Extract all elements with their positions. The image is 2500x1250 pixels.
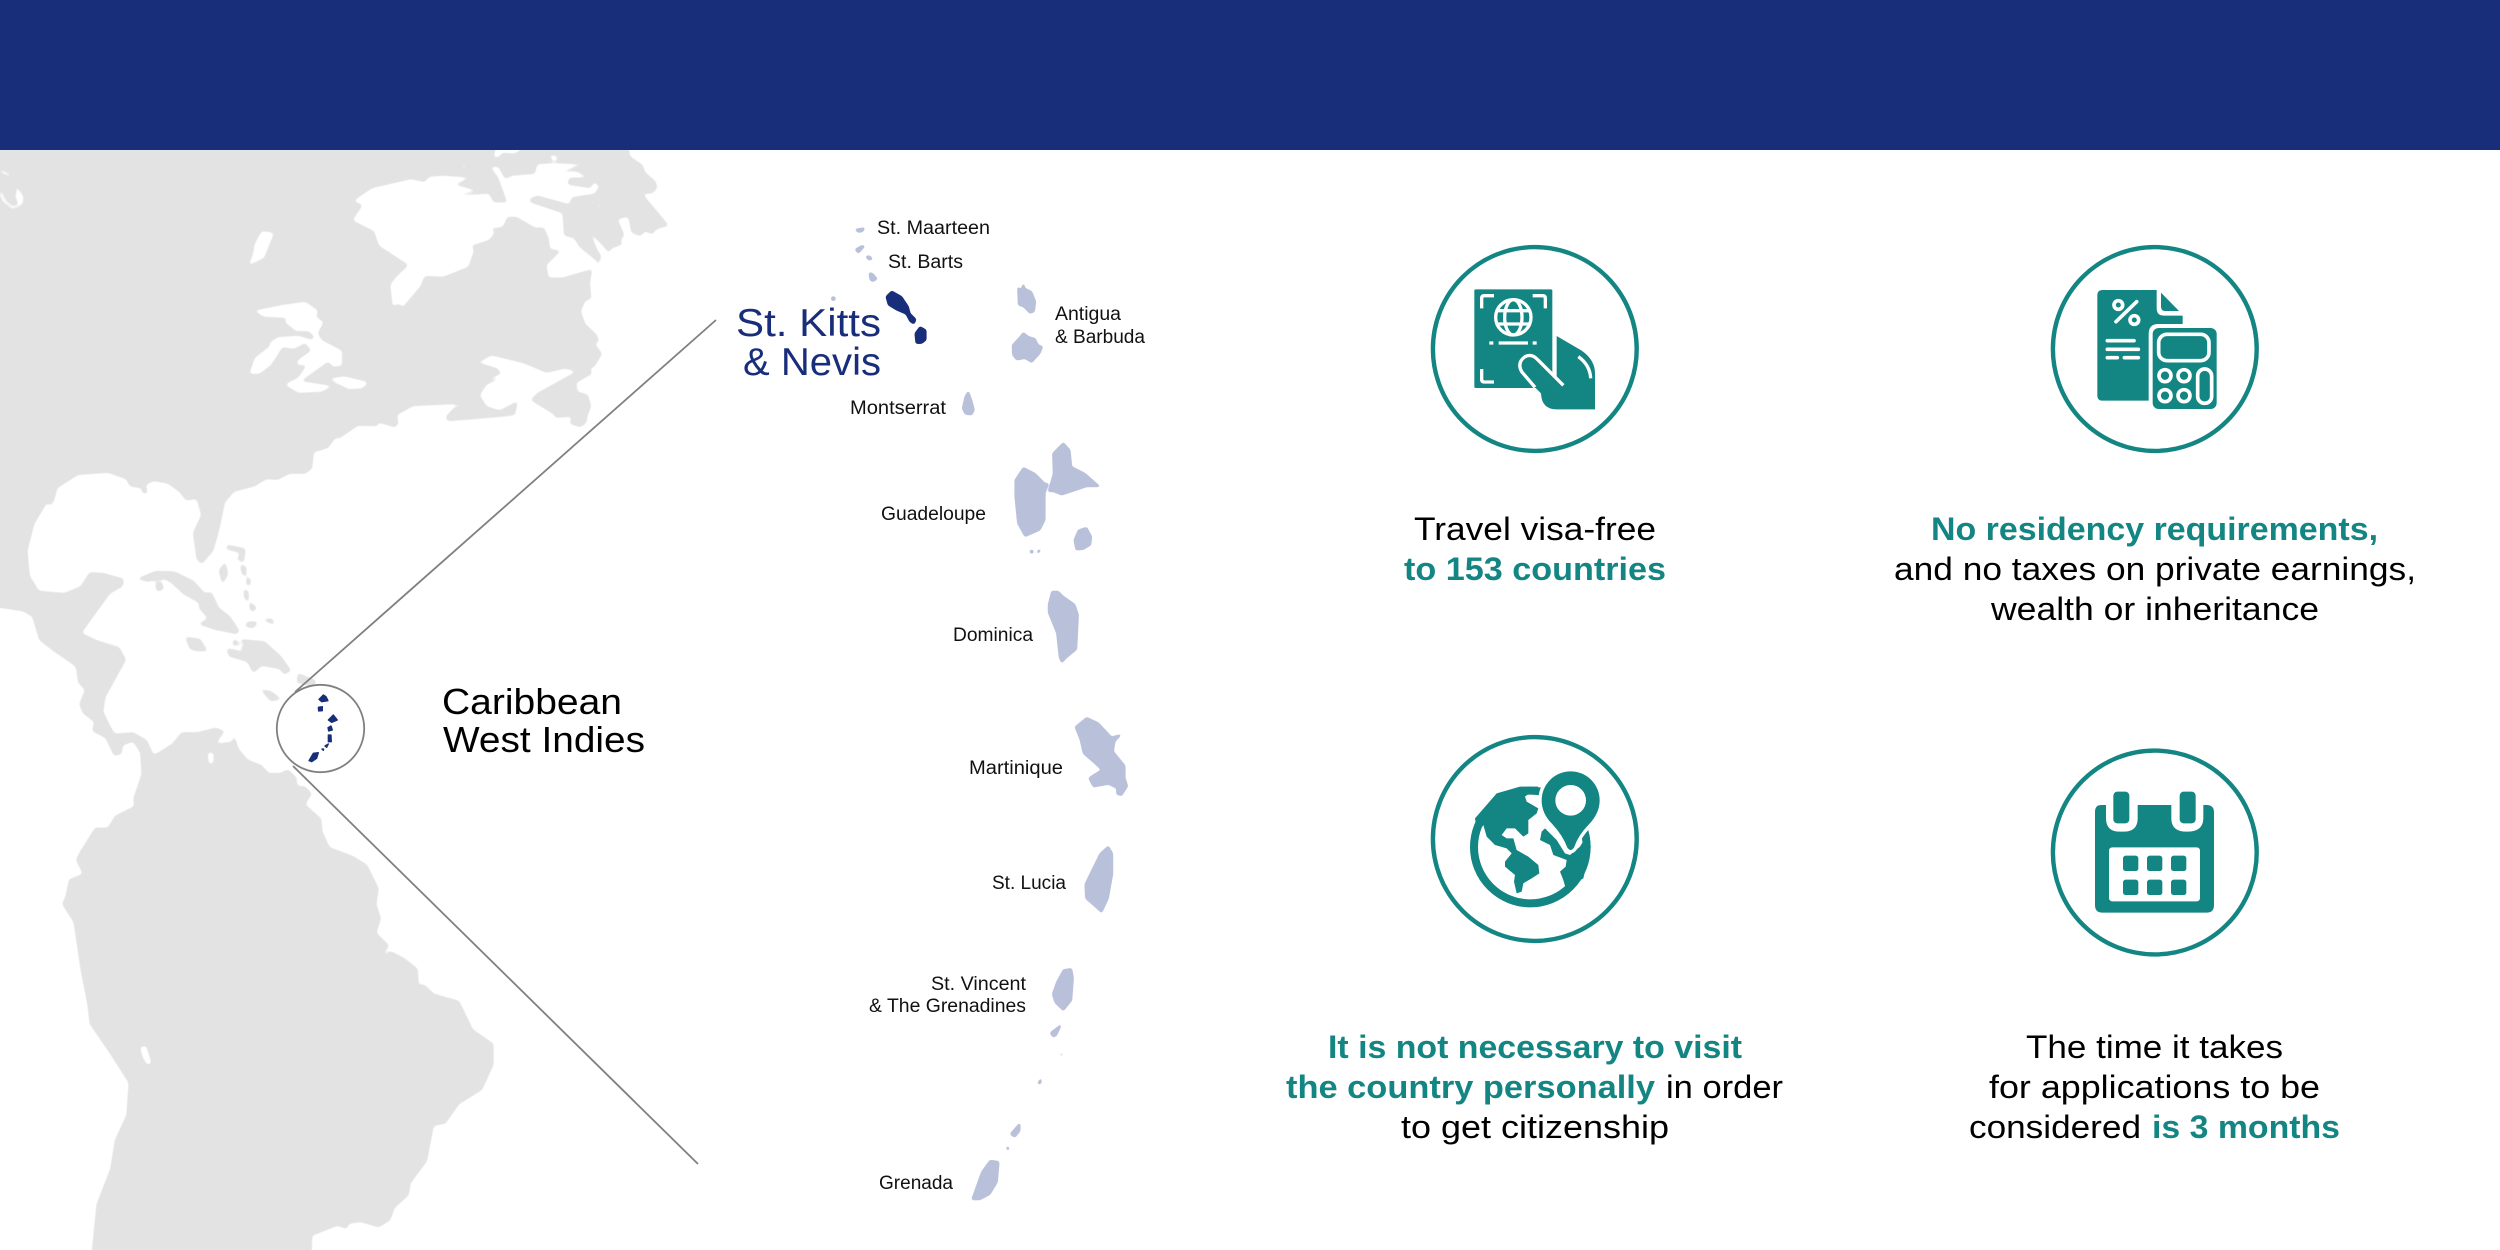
label: Guadeloupe: Guadeloupe: [881, 504, 986, 525]
label: St. Kitts & Nevis: [736, 302, 881, 384]
label: St. Lucia: St. Lucia: [992, 873, 1066, 894]
Hudson Bay and Canadian waters: [353, 158, 599, 307]
label: Antigua & Barbuda: & Barbuda: [1055, 327, 1145, 348]
Caribbean islands grey: [139, 545, 316, 701]
text: time to process applications: [1969, 1029, 2340, 1145]
label: Grenada: Grenada: [879, 1173, 953, 1194]
callout circle on Caribbean: [277, 685, 364, 772]
pale northern islands: [831, 228, 1100, 553]
mini islands inside circle: [309, 695, 337, 762]
text: Travel visa-free: to 153 countries: [1404, 551, 1666, 587]
label: St. Maarteen: St. Maarteen: [877, 218, 990, 239]
icon: passport in hand: [1433, 247, 1637, 451]
label: St. Vincent & The Grenadines: St. Vincent: [931, 974, 1027, 995]
icon: tax document and calculator: [2053, 247, 2257, 451]
text: time to process applications: considered: [1969, 1109, 2141, 1145]
world map: Americas landmass: [0, 130, 800, 1250]
label: St. Barts: St. Barts: [888, 252, 963, 273]
St. Kitts and Nevis islands highlighted: [886, 291, 926, 343]
Lake Maracaibo, Titicaca and Trinidad gap: [140, 752, 312, 1065]
text: No residency requirements: wealth or inheritance: [1990, 591, 2319, 627]
icon: globe with location pin: [1433, 737, 1637, 941]
zoom line lower: [293, 766, 698, 1164]
icon: calendar: [2053, 751, 2257, 954]
text: Travel visa-free: Travel visa-free: [1414, 511, 1656, 547]
text: time to process applications: The time it takes: [2026, 1029, 2283, 1065]
label: Caribbean West Indies: West Indies: [443, 719, 645, 760]
text: time to process applications: for applications to be: [1989, 1069, 2320, 1105]
text: not necessary to visit: to get citizenship: [1401, 1109, 1669, 1145]
label: St. Vincent & The Grenadines: [869, 974, 1027, 1017]
Arctic inlets: [461, 147, 607, 208]
text: No residency requirements: [1894, 511, 2416, 627]
label: Martinique: Martinique: [969, 758, 1063, 779]
Alaska coast fragments: [0, 170, 22, 208]
header band: [0, 0, 2500, 150]
island chain: northern islands: [831, 228, 1100, 553]
text: not necessary to visit: the country personally: [1286, 1069, 1655, 1105]
Lake Winnipeg: [248, 231, 274, 266]
text: No residency requirements: and no taxes on private earnings,: [1894, 551, 2416, 587]
landmass: North, Central and South America: [0, 140, 669, 1250]
label: Antigua & Barbuda: [1055, 304, 1145, 348]
label: St. Vincent & The Grenadines: & The Grenadines: [869, 996, 1026, 1017]
text: not necessary to visit: It is not necessary to visit: [1328, 1029, 1742, 1065]
label: Caribbean West Indies: [442, 681, 645, 760]
island chain: southern islands: [972, 591, 1128, 1200]
label: Dominica: Dominica: [953, 625, 1033, 646]
label: Montserrat: Montserrat: [850, 398, 947, 419]
text: Travel visa-free: [1404, 511, 1666, 587]
Great Lakes: [249, 302, 368, 393]
text: time to process applications: is 3 months: [2152, 1109, 2340, 1145]
label: Caribbean West Indies: Caribbean: [442, 681, 622, 722]
zoom line upper: [295, 320, 716, 692]
text: No residency requirements: No residency requirements,: [1931, 511, 2378, 547]
label: Antigua & Barbuda: Antigua: [1055, 304, 1121, 325]
text: not necessary to visit: [1286, 1029, 1783, 1145]
label: St. Kitts & Nevis: & Nevis: [743, 341, 881, 384]
label: St. Kitts & Nevis: St. Kitts: [736, 302, 881, 345]
text: not necessary to visit: in order: [1666, 1069, 1783, 1105]
